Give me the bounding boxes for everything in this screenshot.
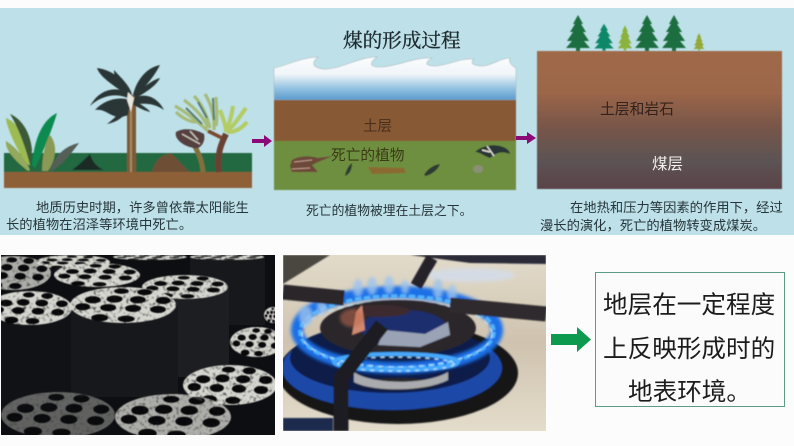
stage 1: living plants in swamp <box>4 65 252 188</box>
stage 3: coal seam under rock <box>537 15 782 189</box>
caption: stage 1: 长的植物在沼泽等环境中死亡。 <box>6 216 192 232</box>
label: dead plants: 死亡的植物 <box>331 147 404 164</box>
callout: conclusion box <box>596 272 784 406</box>
shrub with branching tree <box>218 134 226 172</box>
palm tree <box>127 95 136 172</box>
caption: stage 2: 死亡的植物被埋在土层之下。 <box>306 203 472 218</box>
callout: conclusion box: 地表环境。 <box>628 378 751 406</box>
grates <box>283 292 344 298</box>
arrow: stage 2 to stage 3 <box>516 132 536 144</box>
title: 煤的形成过程 <box>343 30 461 52</box>
callout: conclusion box: 地层在一定程度 <box>603 291 775 319</box>
label: soil and rock: 土层和岩石 <box>600 101 674 118</box>
buried plant remains <box>290 156 333 172</box>
arrow: green conclusion arrow <box>551 327 591 352</box>
burner base <box>354 372 448 389</box>
stage 2: dead plants buried under soil <box>274 57 516 190</box>
flames <box>297 292 497 368</box>
photo: gas stove burner <box>278 255 546 431</box>
photo: honeycomb coal briquettes <box>0 254 284 440</box>
label: soil layer: 土层 <box>363 118 392 135</box>
caption: stage 3: 在地热和压力等因素的作用下，经过 <box>570 200 783 215</box>
label: coal seam: 煤层 <box>652 155 683 173</box>
caption: stage 1: 地质历史时期，许多曾依靠太阳能生 <box>36 200 249 215</box>
outer burner ring <box>283 333 519 425</box>
panel: coal formation diagram <box>0 8 794 235</box>
fern leaves <box>6 141 30 171</box>
arrow: stage 1 to stage 2 <box>252 135 272 147</box>
forest <box>566 15 704 51</box>
caption: stage 3: 漫长的演化，死亡的植物转变成煤炭。 <box>540 218 766 233</box>
callout: conclusion box: 上反映形成时的 <box>603 335 775 363</box>
